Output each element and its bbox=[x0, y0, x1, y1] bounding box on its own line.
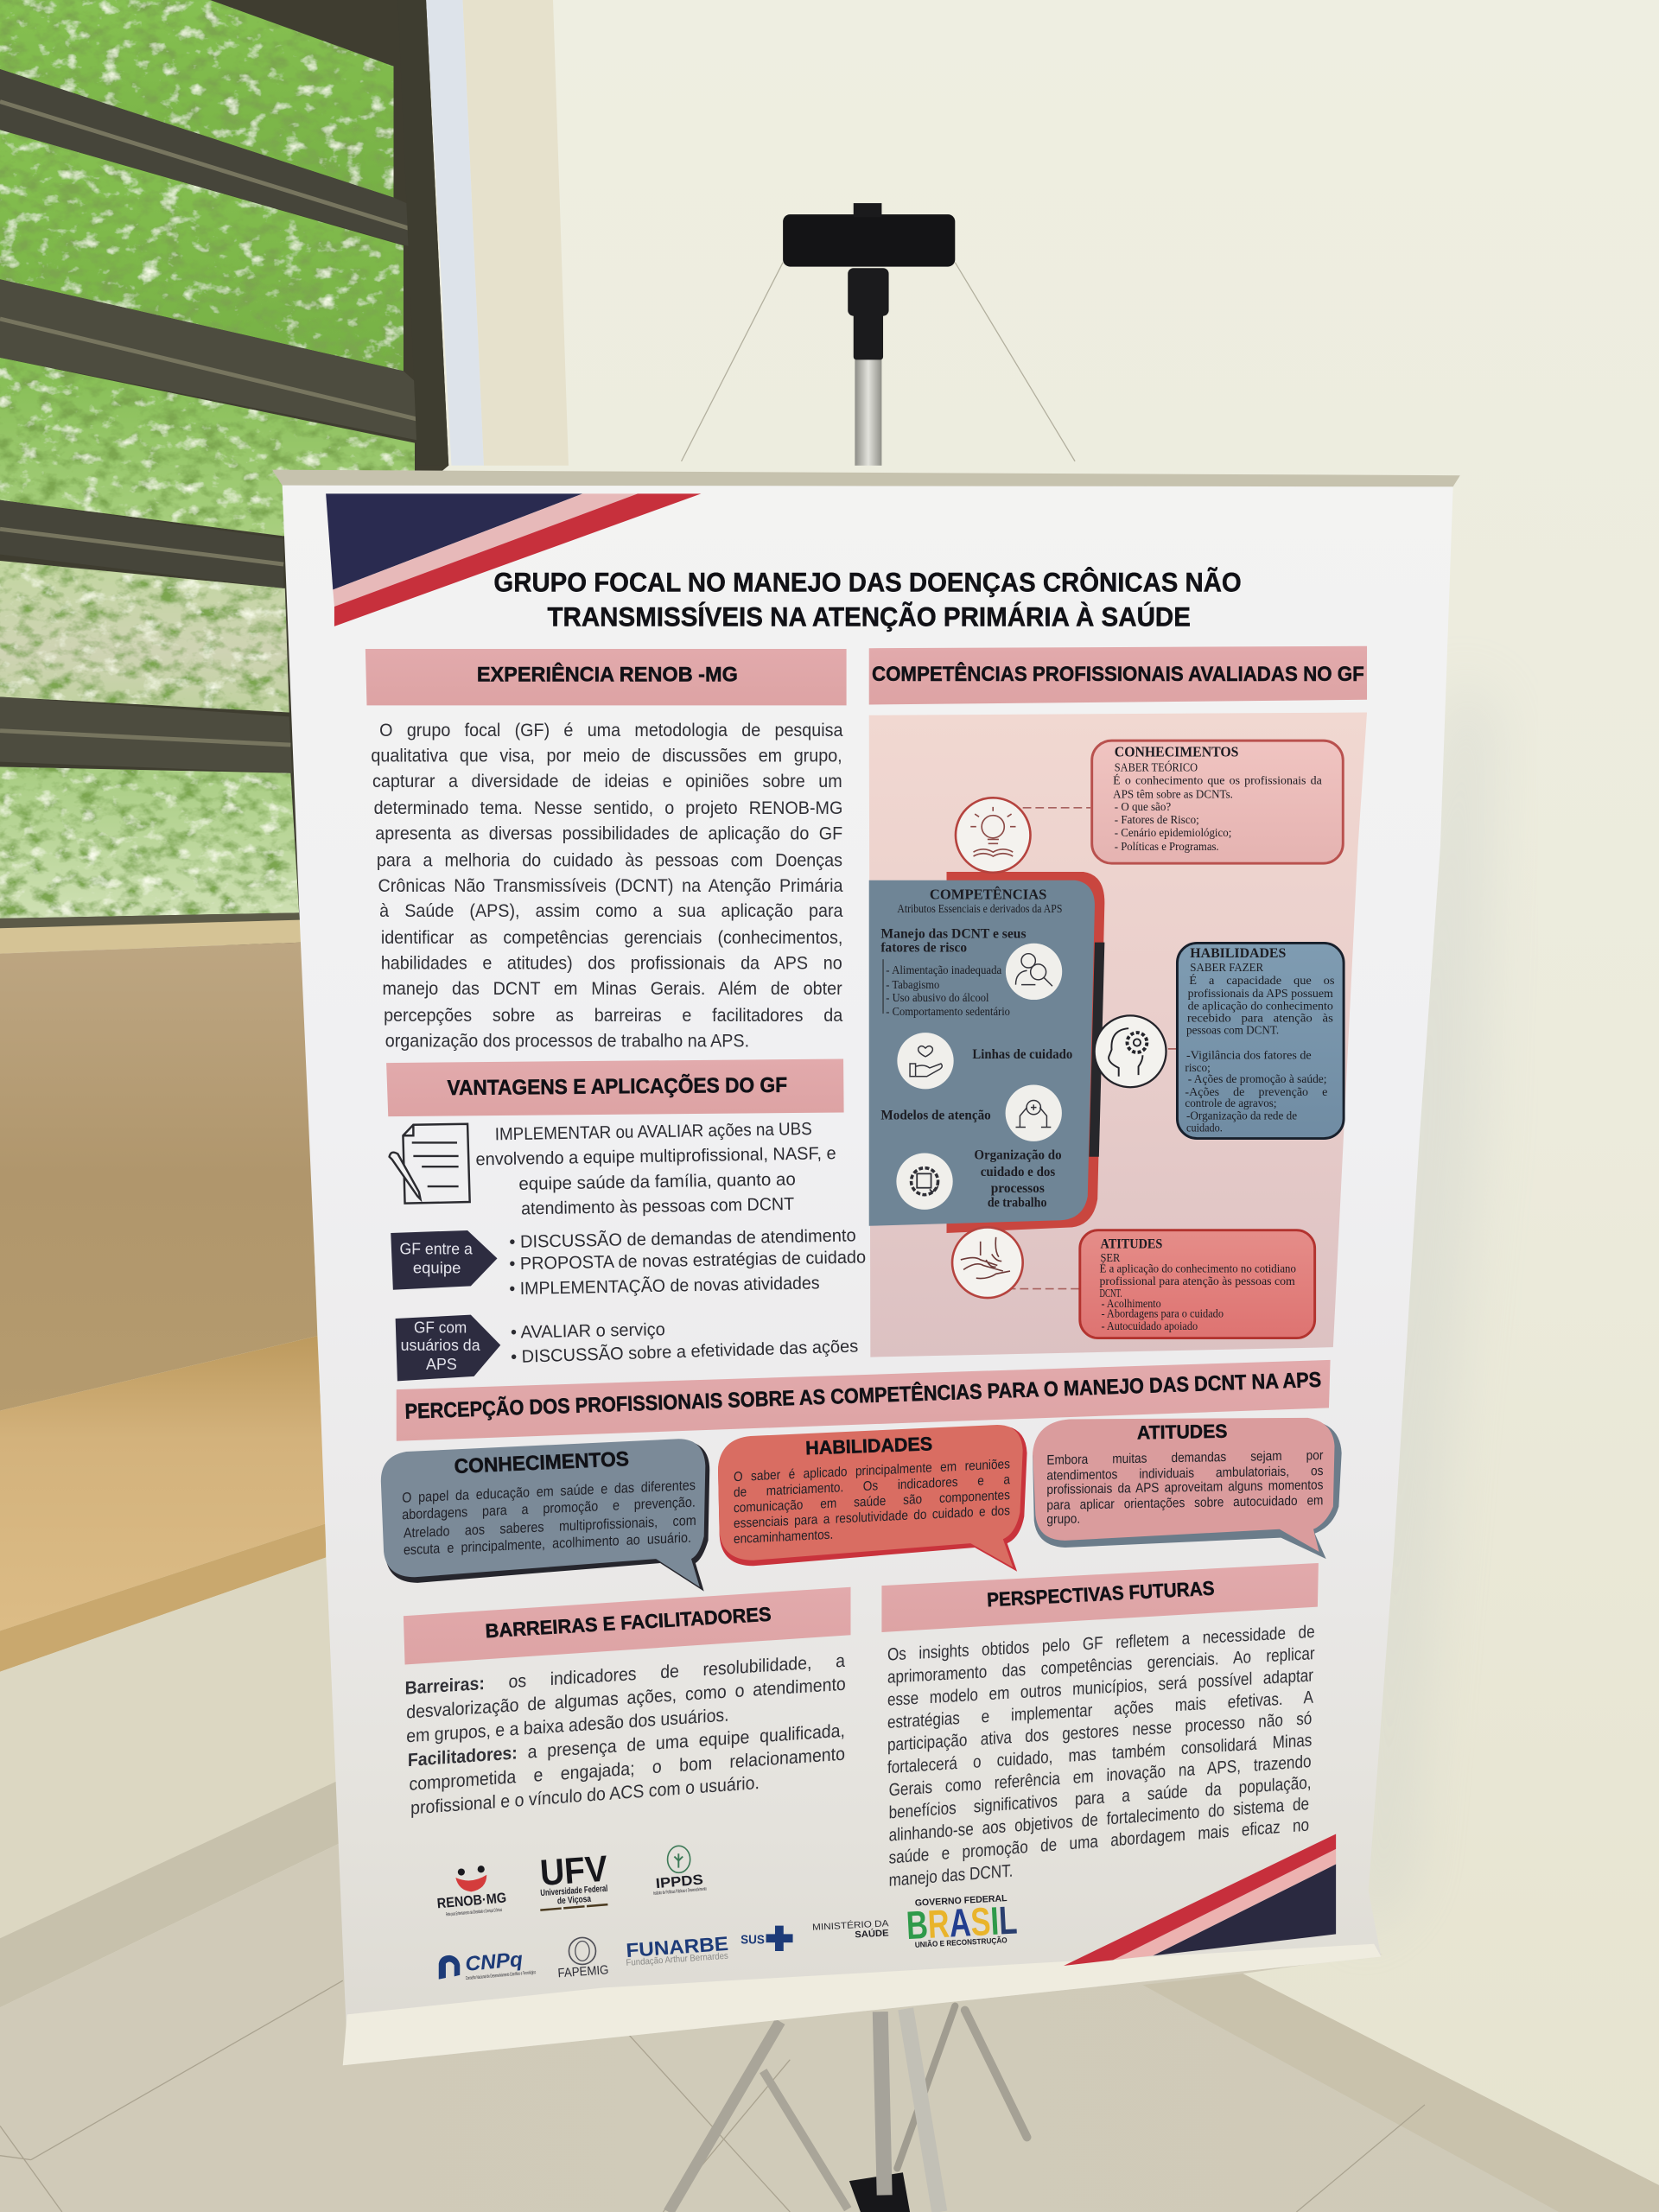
text block: experiencia renob-mg: determinado tema. Nesse sentido, o projeto RENOB-MG bbox=[373, 797, 842, 818]
text block: experiencia renob-mg: à Saúde (APS), assim como a sua aplicação para bbox=[378, 900, 842, 921]
list: equipe bullets: • IMPLEMENTAÇÃO de novas atividades bbox=[509, 1272, 820, 1299]
list: usuarios bullets: • AVALIAR o serviço bbox=[511, 1320, 665, 1343]
card: competencias: processos bbox=[991, 1181, 1045, 1196]
decoration: bottom-right stripes bbox=[1064, 1834, 1336, 1966]
icon: helping hands bbox=[952, 1227, 1023, 1298]
banner stand: top T handle, pole and wires bbox=[682, 203, 1075, 466]
card: atitudes: - Autocuidado apoiado bbox=[1101, 1319, 1198, 1332]
logo: renob-mg bbox=[436, 1866, 507, 1917]
bubble: conhecimentos bbox=[381, 1439, 709, 1592]
logo: SUS: SUS bbox=[741, 1934, 765, 1948]
heading: percepcao dos profissionais bbox=[397, 1360, 1331, 1441]
logo: UFV: Universidade Federal bbox=[540, 1884, 608, 1898]
text: bubble atitudes: para aplicar orientações sobre autocuidado em bbox=[1046, 1492, 1323, 1513]
logo: governo federal brasil: GOVERNO FEDERAL bbox=[914, 1893, 1007, 1909]
card: conhecimentos: SABER TEÓRICO bbox=[1115, 760, 1198, 774]
card: habilidades: recebido para atenção às bbox=[1187, 1012, 1333, 1025]
text: bubble conhecimentos: escuta e principalmente, acolhimento ao usuário. bbox=[404, 1531, 691, 1559]
title: GRUPO FOCAL NO MANEJO DAS DOENÇAS CRÔNICAS NÃO bbox=[493, 566, 1242, 597]
card: competencias: - Uso abusivo do álcool bbox=[886, 991, 989, 1004]
icon: gear and checklist bbox=[896, 1154, 953, 1210]
decoration: top-left stripes bbox=[326, 493, 701, 626]
banner: top rod bbox=[272, 470, 1460, 486]
logo: CNPq bbox=[439, 1948, 536, 1981]
card: conhecimentos: É o conhecimento que os profissionais da bbox=[1113, 772, 1322, 786]
heading: vantagens e aplicacoes bbox=[386, 1058, 844, 1116]
card: habilidades: - Ações de promoção à saúde; bbox=[1188, 1072, 1327, 1085]
text block: barreiras e facilitadores: profissional e o vínculo do ACS com o usuário. bbox=[410, 1771, 760, 1818]
text: implementar ou avaliar bbox=[475, 1120, 836, 1218]
logo: UFV: de Viçosa bbox=[557, 1894, 592, 1906]
title bbox=[493, 566, 1242, 632]
card: competencias: COMPETÊNCIAS bbox=[930, 887, 1046, 903]
text: Rede para Enfrentamento da Obesidade e Doenças Crônicas bbox=[446, 1908, 502, 1917]
text block: experiencia renob-mg bbox=[371, 719, 843, 1051]
card: conhecimentos: - Fatores de Risco; bbox=[1115, 813, 1199, 826]
list: equipe bullets: • DISCUSSÃO de demandas de atendimento bbox=[509, 1224, 856, 1252]
text block: barreiras e facilitadores: em grupos, e a baixa adesão dos usuários. bbox=[406, 1703, 729, 1745]
background: wall pillar beside window bbox=[426, 0, 569, 466]
heading: experiencia renob-mg: EXPERIÊNCIA RENOB -MG bbox=[477, 663, 738, 687]
card: competencias backing bbox=[947, 872, 1104, 1233]
text block: experiencia renob-mg: Crônicas Não Transmissíveis (DCNT) na Atenção Primária bbox=[378, 874, 842, 896]
card: habilidades: HABILIDADES bbox=[1190, 946, 1286, 961]
list: equipe bullets bbox=[509, 1224, 866, 1299]
card: conhecimentos: - Cenário epidemiológico; bbox=[1115, 826, 1231, 839]
card: habilidades: -Vigilância dos fatores de bbox=[1186, 1049, 1312, 1062]
card: habilidades: pessoas com DCNT. bbox=[1186, 1023, 1279, 1036]
bubble: habilidades: HABILIDADES bbox=[805, 1433, 933, 1459]
text: implementar ou avaliar: atendimento às pessoas com DCNT bbox=[521, 1195, 794, 1218]
logo: governo federal brasil: BRASIL bbox=[906, 1897, 1018, 1948]
card: habilidades: -Ações de prevenção e bbox=[1185, 1085, 1327, 1098]
heading: competencias profissionais bbox=[869, 646, 1367, 705]
icon: head with gear bbox=[1095, 1015, 1166, 1087]
tag: GF com usuarios da APS: GF com bbox=[414, 1319, 467, 1337]
tag: GF com usuarios da APS bbox=[396, 1315, 500, 1381]
text block: barreiras e facilitadores: Facilitadores: a presença de uma equipe qualificada, bbox=[408, 1719, 845, 1770]
card: atitudes: - Abordagens para o cuidado bbox=[1101, 1306, 1224, 1319]
logo: IPPDS: IPPDS bbox=[655, 1872, 704, 1891]
text block: barreiras e facilitadores: desvalorização de algumas ações, como o atendimento bbox=[405, 1672, 845, 1722]
card: competencias bbox=[869, 880, 1104, 1226]
window with foliage bbox=[0, 0, 448, 945]
card: competencias: Manejo das DCNT e seus bbox=[880, 926, 1027, 941]
logo: ministerio da saude: MINISTÉRIO DA bbox=[812, 1917, 890, 1933]
text: bubble conhecimentos bbox=[402, 1478, 696, 1559]
text: bubble conhecimentos: Atrelado aos saberes multiprofissionais, com bbox=[403, 1513, 696, 1541]
text: bubble atitudes: Embora muitas demandas sejam por bbox=[1046, 1448, 1323, 1469]
bubble: atitudes bbox=[1033, 1418, 1342, 1559]
card: competencias: Organização do bbox=[974, 1148, 1062, 1163]
list: usuarios bullets: • DISCUSSÃO sobre a efetividade das ações bbox=[511, 1335, 859, 1367]
card: competencias: - Alimentação inadequada bbox=[886, 963, 1001, 976]
text: bubble habilidades: encaminhamentos. bbox=[734, 1528, 833, 1548]
text block: experiencia renob-mg: manejo das DCNT em Minas Gerais. Além de obter bbox=[382, 978, 842, 999]
text: bubble atitudes bbox=[1046, 1448, 1324, 1528]
icon: hands with cross bbox=[1006, 1085, 1062, 1141]
card: atitudes: - Acolhimento bbox=[1101, 1297, 1161, 1310]
text: bubble conhecimentos: O papel da educação em saúde e das diferentes bbox=[402, 1478, 696, 1507]
wood panel and table bbox=[0, 919, 341, 2007]
card: competencias: Linhas de cuidado bbox=[972, 1047, 1073, 1062]
card: conhecimentos: - O que são? bbox=[1115, 800, 1171, 813]
card: competencias: Atributos Essenciais e derivados da APS bbox=[897, 902, 1062, 915]
text block: experiencia renob-mg: apresenta as diversas possibilidades de aplicação do GF bbox=[375, 823, 842, 844]
text block: perspectivas futuras: esse modelo em outros municípios, será possível adaptar bbox=[887, 1665, 1313, 1710]
text: bubble atitudes: atendimentos individuais ambulatoriais, os bbox=[1046, 1463, 1323, 1484]
card: conhecimentos: CONHECIMENTOS bbox=[1115, 744, 1238, 760]
text: bubble conhecimentos: abordagens para a promoção e prevenção. bbox=[402, 1496, 696, 1524]
card: atitudes: ATITUDES bbox=[1100, 1236, 1162, 1251]
card: habilidades: SABER FAZER bbox=[1190, 961, 1264, 974]
card: habilidades: cuidado. bbox=[1186, 1121, 1223, 1134]
logo: CNPq: CNPq bbox=[464, 1948, 524, 1976]
text: implementar ou avaliar: equipe saúde da família, quanto ao bbox=[518, 1170, 796, 1194]
text block: perspectivas futuras bbox=[887, 1622, 1315, 1891]
text block: experiencia renob-mg: percepções sobre as barreiras e facilitadores da bbox=[384, 1004, 842, 1025]
tag: GF com usuarios da APS: APS bbox=[426, 1355, 457, 1373]
card: habilidades: -Organização da rede de bbox=[1186, 1109, 1297, 1122]
card: atitudes: DCNT. bbox=[1099, 1287, 1122, 1300]
logo: IPPDS bbox=[653, 1846, 707, 1897]
card: atitudes: É a aplicação do conhecimento no cotidiano bbox=[1099, 1261, 1296, 1274]
logo: governo federal brasil: UNIÃO E RECONSTRUÇÃO bbox=[915, 1936, 1007, 1949]
text: bubble atitudes: grupo. bbox=[1046, 1512, 1080, 1528]
card: atitudes: SER bbox=[1100, 1251, 1121, 1264]
text: Os insights obtidos pelo GF refletem a necessidade de bbox=[887, 1622, 1315, 1665]
text: implementar ou avaliar: envolvendo a equipe multiprofissional, NASF, e bbox=[475, 1144, 836, 1169]
card: conhecimentos: APS têm sobre as DCNTs. bbox=[1113, 788, 1233, 801]
text block: experiencia renob-mg: habilidades e atitudes) dos profissionais da APS no bbox=[381, 952, 842, 973]
icon: document and pencil bbox=[390, 1124, 470, 1204]
text block: experiencia renob-mg: O grupo focal (GF) é uma metodologia de pesquisa bbox=[378, 719, 842, 741]
icon: person with magnifier bbox=[1006, 944, 1062, 1000]
text block: experiencia renob-mg: identificar as competências gerenciais (conhecimentos, bbox=[380, 926, 842, 947]
text block: barreiras e facilitadores: comprometida e engajada; o bom relacionamento bbox=[409, 1742, 845, 1794]
text: bubble habilidades: essenciais para a resolutividade do cuidado e dos bbox=[734, 1503, 1010, 1532]
logo: ministerio da saude: SAÚDE bbox=[855, 1927, 889, 1940]
heading: barreiras e facilitadores bbox=[404, 1587, 850, 1665]
text block: perspectivas futuras: benefícios significativos para a saúde da população, bbox=[888, 1772, 1311, 1822]
logo: UFV: UFV bbox=[538, 1848, 609, 1893]
heading: vantagens e aplicacoes: VANTAGENS E APLICAÇÕES DO GF bbox=[447, 1073, 787, 1100]
heading: perspectivas futuras: PERSPECTIVAS FUTURAS bbox=[987, 1577, 1215, 1611]
text: bubble atitudes: profissionais da APS aproveitam alguns momentos bbox=[1046, 1478, 1323, 1498]
bubble: atitudes: ATITUDES bbox=[1137, 1421, 1228, 1443]
bubble: conhecimentos: CONHECIMENTOS bbox=[454, 1448, 630, 1478]
heading: barreiras e facilitadores: BARREIRAS E FACILITADORES bbox=[485, 1603, 772, 1642]
card: habilidades: profissionais da APS possuem bbox=[1188, 987, 1333, 1000]
text block: perspectivas futuras: saúde e promoção de uma abordagem mais eficaz no bbox=[889, 1815, 1309, 1868]
logo: FUNARBE: Fundação Arthur Bernardes bbox=[626, 1951, 728, 1968]
text: bubble habilidades bbox=[734, 1457, 1010, 1548]
card: habilidades: risco; bbox=[1185, 1061, 1211, 1074]
card: competencias: de trabalho bbox=[988, 1195, 1047, 1210]
card: competencias: cuidado e dos bbox=[981, 1165, 1055, 1179]
title: TRANSMISSÍVEIS NA ATENÇÃO PRIMÁRIA À SAÚDE bbox=[547, 601, 1191, 632]
text: Barreiras: os indicadores de resolubilidade, a bbox=[405, 1649, 845, 1698]
card: habilidades: É a capacidade que os bbox=[1189, 973, 1334, 987]
text block: perspectivas futuras: fortalecerá o cuidado, mas também consolidará Minas bbox=[887, 1731, 1312, 1777]
tag: GF entre a equipe bbox=[391, 1230, 498, 1290]
logo: IPPDS: Instituto de Políticas Públicas e Desenvolvimento bbox=[653, 1887, 707, 1897]
tag: GF entre a equipe: equipe bbox=[413, 1258, 461, 1276]
logo: CNPq: Conselho Nacional de Desenvolvimento Científico e Tecnológico bbox=[466, 1970, 536, 1981]
heading: competencias profissionais: COMPETÊNCIAS PROFISSIONAIS AVALIADAS NO GF bbox=[872, 662, 1364, 686]
card: competencias: - Comportamento sedentário bbox=[886, 1005, 1010, 1018]
logo: renob-mg: RENOB·MG bbox=[436, 1890, 507, 1911]
logo: FAPEMIG: FAPEMIG bbox=[557, 1963, 609, 1980]
text: implementar ou avaliar: IMPLEMENTAR ou AVALIAR ações na UBS bbox=[495, 1120, 812, 1144]
card: habilidades: controle de agravos; bbox=[1185, 1096, 1277, 1109]
icon: lightbulb on book bbox=[956, 798, 1030, 873]
text block: experiencia renob-mg: capturar a diversidade de ideias e opiniões sobre um bbox=[372, 771, 842, 792]
bubble: habilidades bbox=[718, 1425, 1027, 1572]
text block: perspectivas futuras: alinhando-se aos objetivos de fortalecimento do sistema de bbox=[889, 1794, 1309, 1846]
card: conhecimentos: - Políticas e Programas. bbox=[1115, 840, 1219, 853]
heading: perspectivas futuras bbox=[881, 1563, 1319, 1632]
floor bbox=[0, 1842, 1659, 2212]
banner stand: legs bbox=[669, 2006, 1027, 2212]
card: competencias: Modelos de atenção bbox=[880, 1108, 991, 1122]
logo: FAPEMIG bbox=[557, 1937, 609, 1980]
text: bubble habilidades: comunicação em saúde são componentes bbox=[734, 1488, 1010, 1516]
logo: UFV bbox=[538, 1848, 609, 1910]
tag: GF com usuarios da APS: usuários da bbox=[401, 1336, 480, 1354]
banner: paper sheet bbox=[283, 482, 1453, 2065]
card: atitudes: profissional para atenção às pessoas com bbox=[1099, 1274, 1295, 1287]
text block: perspectivas futuras: Gerais como referência em inovação na APS, trazendo bbox=[888, 1751, 1311, 1800]
logo: FUNARBE: FUNARBE bbox=[626, 1932, 729, 1961]
text block: perspectivas futuras: estratégias e implementar ações mais efetivas. A bbox=[887, 1688, 1313, 1732]
card: habilidades: de aplicação do conhecimento bbox=[1188, 1000, 1333, 1013]
text: bubble habilidades: O saber é aplicado principalmente em reuniões bbox=[734, 1457, 1010, 1485]
card: competencias: - Tabagismo bbox=[886, 978, 939, 991]
list: usuarios bullets bbox=[511, 1320, 859, 1367]
text block: barreiras e facilitadores bbox=[405, 1649, 845, 1818]
text: bubble habilidades: de matriciamento. Os indicadores e a bbox=[734, 1472, 1010, 1501]
panel: competencias diagram bbox=[869, 712, 1367, 1357]
text block: experiencia renob-mg: qualitativa que visa, por meio de discussões em grupo, bbox=[371, 745, 842, 766]
card: conhecimentos bbox=[1092, 741, 1343, 863]
list: equipe bullets: • PROPOSTA de novas estratégias de cuidado bbox=[509, 1248, 866, 1274]
text block: experiencia renob-mg: organização dos processos de trabalho na APS. bbox=[385, 1030, 749, 1051]
text block: perspectivas futuras: participação ativa dos gestores nesse processo não só bbox=[887, 1708, 1312, 1755]
icon: hand with heart bbox=[897, 1033, 954, 1089]
logo: ministerio da saude bbox=[812, 1917, 890, 1940]
text block: perspectivas futuras: manejo das DCNT. bbox=[889, 1861, 1013, 1891]
card: atitudes bbox=[1080, 1230, 1315, 1338]
tag: GF entre a equipe: GF entre a bbox=[400, 1239, 473, 1257]
card: habilidades bbox=[1177, 943, 1344, 1139]
heading: percepcao dos profissionais: PERCEPÇÃO DOS PROFISSIONAIS SOBRE AS COMPETÊNCIAS PARA O MANEJO DAS DCNT NA APS bbox=[404, 1368, 1322, 1424]
card: competencias: fatores de risco bbox=[880, 941, 967, 956]
heading: experiencia renob-mg bbox=[365, 649, 847, 705]
text block: experiencia renob-mg: para a melhoria do cuidado às pessoas com Doenças bbox=[377, 849, 842, 870]
text block: perspectivas futuras: aprimoramento das competências gerenciais. Ao replicar bbox=[887, 1643, 1315, 1688]
connector dashes bbox=[1007, 808, 1177, 1289]
logo: SUS bbox=[741, 1926, 793, 1951]
